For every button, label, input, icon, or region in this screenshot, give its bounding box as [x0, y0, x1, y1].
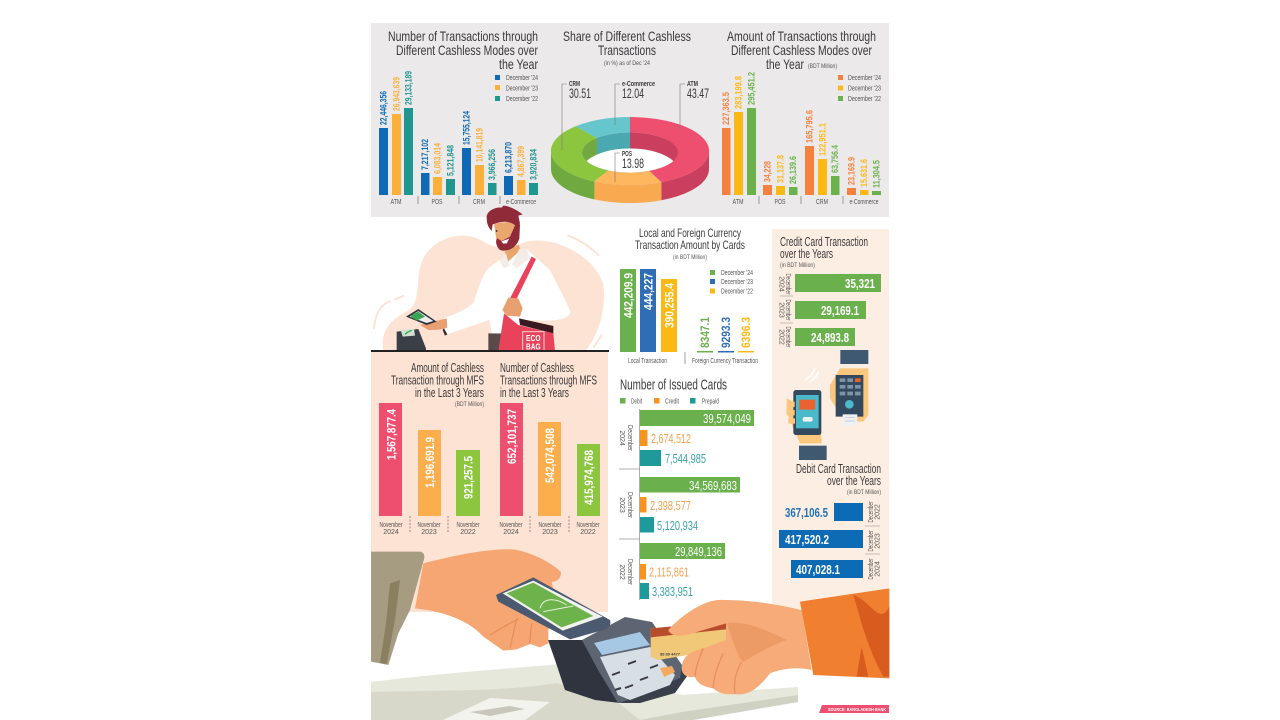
heading: share: [563, 28, 691, 67]
bar value labels: 5,121,848: [446, 145, 456, 176]
bars: [379, 403, 480, 516]
heading: Transaction Amount by Cards: [635, 238, 745, 252]
divider line under illustration: [371, 350, 609, 352]
donut: [551, 117, 709, 203]
donut label POS: POS: [622, 151, 632, 158]
bar value labels: 6,213,870: [504, 142, 514, 173]
year labels: December: [784, 326, 791, 348]
bars: [379, 108, 538, 195]
illustration: left hand holding phone: [371, 549, 610, 665]
icon: phone and card terminal: [787, 350, 868, 460]
legend: December '24: [721, 270, 753, 277]
heading: share: Share of Different Cashless: [563, 28, 691, 44]
legend: December '22: [848, 96, 881, 103]
bars: 367,106.5: [785, 505, 828, 520]
bar value labels: 7,217,102: [420, 139, 430, 170]
chart: share donut: [551, 28, 709, 203]
bag label: ECO: [526, 333, 541, 343]
chart: number of cashless transactions through MFS: [500, 360, 600, 536]
bars: [722, 108, 881, 195]
donut label ATM: ATM: [687, 81, 698, 88]
bar value labels: 2,398,577: [650, 498, 691, 513]
chart: amount of cashless transaction through MFS: [379, 360, 484, 536]
illustration: man paying with phone: [374, 206, 604, 352]
illustration: card terminal: [548, 617, 690, 703]
category axis labels: ATM: [390, 199, 402, 206]
bar value labels: 7,544,985: [665, 451, 706, 466]
legend: [620, 398, 719, 406]
bar value labels: 39,574,049: [703, 411, 751, 426]
bars: 6396.3: [739, 317, 753, 348]
heading: (in BDT Million): [847, 490, 881, 496]
heading: number of transactions: Number of Transactions through: [388, 28, 538, 44]
bar value labels: 29,133,189: [404, 71, 414, 105]
bar value labels: 3,920,834: [528, 149, 538, 180]
year labels: 2023: [778, 302, 784, 318]
bar value labels: [649, 411, 751, 599]
chart: debit card transaction: [779, 462, 882, 580]
donut label e-Commerce: 12.04: [622, 85, 644, 101]
year labels: December: [784, 300, 791, 321]
legend: December '24: [848, 75, 881, 82]
bar value labels: 23,169.9: [846, 157, 856, 185]
heading: over the Years: [780, 247, 833, 261]
heading: amount of transactions: Different Cashless Modes over: [731, 42, 872, 58]
bars: 407,028.1: [796, 562, 840, 577]
legend: December '23: [721, 279, 753, 286]
bar value labels: 26,943,639: [392, 77, 402, 111]
year labels: [778, 274, 793, 348]
legend: December '23: [848, 86, 881, 92]
category axis labels: e-Commerce: [506, 199, 536, 206]
donut label POS: [622, 151, 644, 171]
year labels: December: [868, 558, 875, 580]
bar value labels: 63,756.4: [830, 145, 840, 173]
year labels: December: [784, 274, 791, 295]
bar value labels: 283,199.8: [734, 76, 744, 109]
chart: number of transactions through cashless modes: [378, 28, 538, 206]
heading: (BDT Million): [455, 402, 484, 408]
heading: Credit Card Transaction: [780, 235, 868, 249]
illustration: right hand holding card: 88 89 4477: [660, 651, 681, 656]
bar value labels: 26,139.6: [788, 156, 798, 184]
heading: share: Transactions: [598, 42, 656, 58]
legend: Prepaid: [702, 398, 719, 406]
year labels: 2022: [618, 564, 625, 580]
legend: December '23: [506, 86, 538, 92]
year labels: December: [868, 501, 875, 522]
bar value labels: 2,115,861: [649, 564, 689, 580]
legend: [838, 75, 881, 103]
source tag: SOURCE: BANGLADESH BANK: [828, 707, 887, 712]
bar value labels: 5,120,934: [657, 518, 698, 533]
bars: [795, 274, 881, 346]
category axis labels: [732, 196, 879, 206]
heading: Transaction through MFS: [391, 372, 484, 388]
heading: Number of Issued Cards: [620, 376, 727, 394]
bars: 29,169.1: [821, 303, 859, 318]
donut label e-Commerce: e-Commerce: [622, 81, 655, 88]
legend: Credit: [665, 398, 679, 406]
axis labels: 2023: [421, 529, 437, 536]
heading: [780, 235, 868, 269]
heading: Amount of Cashless: [411, 360, 484, 375]
axis labels: November: [418, 522, 441, 529]
legend: December '22: [506, 96, 538, 103]
heading: Transactions through MFS: [500, 372, 597, 388]
axis labels: Foreign Currency Transaction: [692, 358, 758, 365]
bars: [779, 503, 863, 578]
axis labels: 2023: [542, 529, 558, 536]
category axis labels: CRM: [473, 199, 485, 206]
axis labels: November: [538, 522, 562, 529]
bars: 390,255.4: [662, 283, 676, 328]
donut label ATM: [687, 81, 709, 101]
bars: 8347.1: [698, 317, 712, 348]
bars: [640, 410, 754, 599]
bar value labels: [378, 71, 538, 180]
legend: December '22: [721, 288, 753, 296]
bars: 417,520.2: [785, 532, 829, 547]
year labels: December: [868, 530, 875, 552]
year labels: December: [626, 559, 633, 586]
bars: 442,209.9: [622, 273, 636, 318]
bar value labels: 15,755,124: [462, 111, 472, 145]
year labels: [618, 425, 633, 586]
bar value labels: 34,569,683: [689, 478, 737, 493]
year labels: 2024: [874, 561, 882, 577]
legend: [495, 75, 538, 103]
chart: amount of transactions through cashless modes: [721, 28, 882, 206]
heading: in the Last 3 Years: [415, 385, 484, 400]
heading: amount of transactions: (BDT Million): [808, 64, 837, 70]
axis labels: 2022: [580, 529, 596, 536]
year labels: December: [626, 492, 633, 519]
category axis labels: [390, 196, 536, 206]
year labels: 2022: [778, 329, 784, 345]
year labels: 2023: [874, 533, 882, 549]
bar value labels: 227,363.5: [721, 92, 731, 125]
bars: 542,074,508: [543, 428, 557, 483]
background: MFS peach panel: [371, 352, 608, 612]
illustration: counter: [371, 664, 798, 720]
year labels: [865, 501, 882, 580]
bars: 444,227: [642, 273, 656, 310]
year labels: 2024: [618, 430, 625, 446]
chart: number of issued cards: [618, 376, 754, 600]
year labels: December: [626, 425, 633, 452]
bar value labels: 34,228: [762, 161, 772, 182]
bars: 921,257.5: [462, 456, 476, 499]
axis labels: 2022: [460, 529, 476, 536]
axis labels: 2024: [383, 529, 399, 536]
donut label ATM: 43.47: [687, 85, 709, 101]
background: right peach panel: [772, 229, 889, 609]
axis labels: Local Transaction: [628, 358, 667, 365]
heading: share: (in %) as of Dec '24: [604, 61, 651, 67]
bars: 1,567,877.4: [384, 409, 398, 460]
heading: [391, 360, 484, 408]
legend: [710, 270, 753, 296]
heading: amount of transactions: the Year: [766, 56, 804, 72]
bar value labels: 22,446,356: [378, 91, 388, 125]
axis labels: 2024: [503, 529, 519, 536]
category axis labels: ATM: [732, 199, 744, 206]
heading: Local and Foreign Currency: [639, 226, 741, 240]
heading: in the Last 3 Years: [500, 385, 569, 400]
donut label POS: 13.98: [622, 155, 644, 171]
category axis labels: POS: [774, 199, 786, 206]
source tag: [819, 705, 889, 713]
donut label CRM: CRM: [569, 81, 580, 88]
category axis labels: POS: [432, 199, 443, 206]
bar value labels: 3,383,951: [652, 584, 693, 599]
heading: amount of transactions: [727, 28, 876, 72]
bars: 1,196,691.9: [423, 437, 437, 488]
bar value labels: 2,674,512: [651, 431, 691, 446]
bar value labels: 11,304.5: [872, 160, 882, 188]
bag label: BAG: [526, 342, 541, 352]
bar value labels: 10,141,819: [474, 128, 484, 162]
bars: 24,893.8: [811, 330, 849, 345]
bag label: [523, 332, 544, 352]
bar value labels: 29,849,136: [675, 544, 722, 559]
heading: number of transactions: the Year: [499, 56, 538, 72]
legend: December '24: [506, 75, 538, 82]
bars: 9293.3: [719, 317, 733, 348]
heading: (in BDT Million): [673, 255, 707, 261]
heading: (in BDT Million): [780, 263, 815, 269]
bar value labels: 295,451.2: [746, 72, 756, 105]
legend: Debit: [631, 398, 642, 406]
axis labels: [628, 352, 758, 365]
heading: number of transactions: [388, 28, 538, 72]
axis labels: [380, 516, 480, 536]
illustration: right hand holding card: [651, 588, 889, 694]
donut label CRM: [569, 81, 591, 101]
bar value labels: 4,867,399: [516, 146, 526, 177]
bar value labels: 6,083,014: [432, 143, 442, 174]
year labels: 2022: [874, 504, 882, 520]
bar value labels: 122,951.1: [818, 123, 828, 156]
heading: Debit Card Transaction: [796, 462, 881, 476]
bars: 35,321: [845, 276, 875, 291]
bars: [500, 403, 600, 516]
category axis labels: CRM: [816, 199, 828, 206]
bars: 415,974,768: [582, 450, 596, 505]
heading: [635, 226, 745, 261]
axis labels: [500, 516, 600, 536]
heading: number of transactions: Different Cashless Modes over: [396, 42, 538, 58]
bar value labels: [721, 72, 882, 188]
bar value labels: 15,631.6: [859, 159, 869, 187]
donut label CRM: 30.51: [569, 85, 591, 101]
year labels: 2023: [618, 497, 625, 513]
axis labels: November: [500, 522, 523, 529]
heading: over the Years: [827, 474, 881, 488]
bars: 652,101,737: [505, 409, 519, 464]
heading: [500, 360, 597, 400]
bar value labels: 31,137.8: [776, 155, 786, 183]
heading: Number of Cashless: [500, 360, 574, 375]
heading: [796, 462, 881, 496]
axis labels: November: [456, 522, 480, 529]
category axis labels: e-Commerce: [850, 199, 879, 206]
chart: local and foreign currency transaction: [620, 226, 758, 365]
axis labels: November: [576, 522, 600, 529]
axis labels: November: [380, 522, 403, 529]
chart: credit card transaction: [778, 235, 881, 348]
year labels: 2024: [778, 276, 784, 292]
heading: amount of transactions: Amount of Transactions through: [727, 28, 876, 44]
donut leader lines: [562, 84, 685, 182]
bars: [620, 269, 754, 352]
bar value labels: 3,966,256: [487, 149, 497, 180]
bar value labels: 165,795.6: [804, 110, 814, 143]
panel: top grey section: [371, 23, 889, 217]
